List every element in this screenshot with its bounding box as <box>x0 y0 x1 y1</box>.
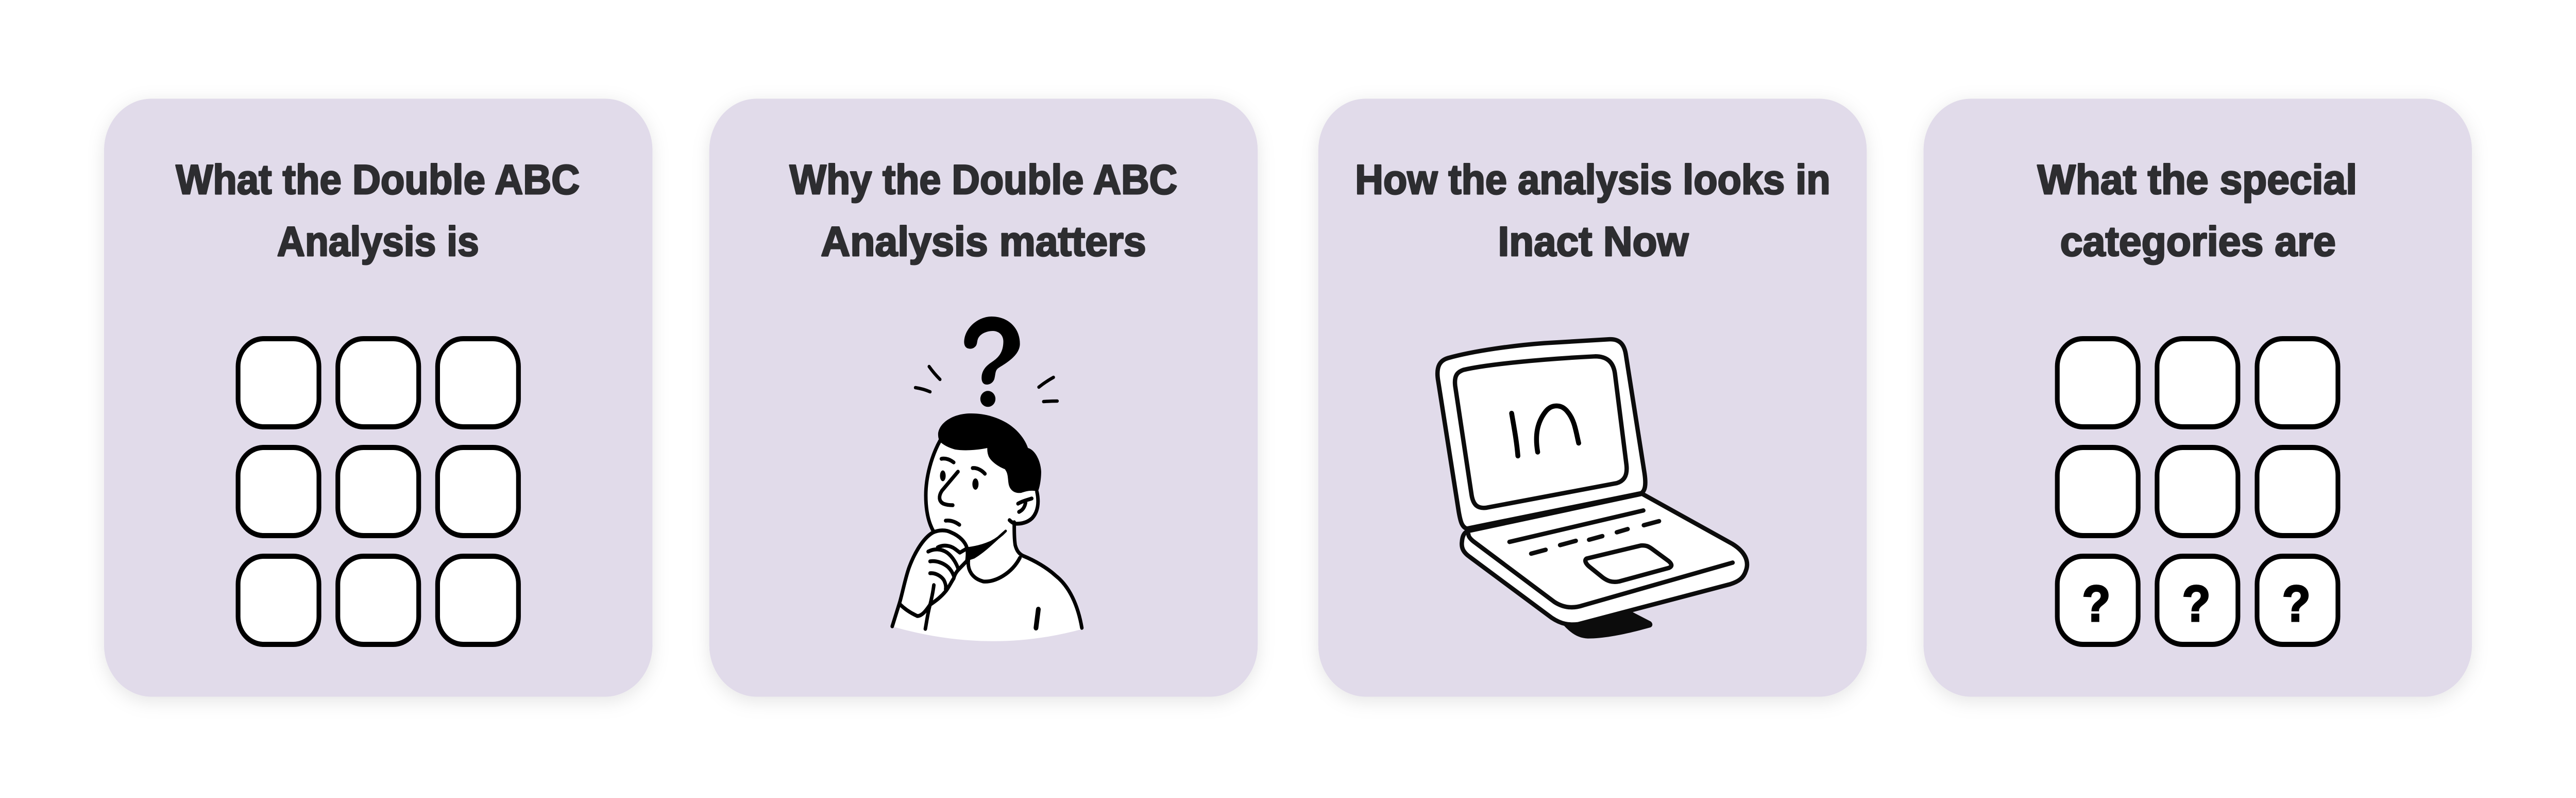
icon: trackpad <box>1585 545 1671 582</box>
heading: why the Double ABC Analysis matters: Why the Double ABC <box>790 157 1177 203</box>
icon: person silhouette <box>892 438 1083 641</box>
icon: laptop base <box>1462 494 1747 625</box>
icon: emphasis sparks <box>916 367 1057 402</box>
icon: laptop screen <box>1455 356 1626 508</box>
icon: grid of boxes with question marks: ? <box>2282 575 2311 633</box>
heading: what the special categories are: categories are <box>2060 219 2336 265</box>
heading: how the analysis looks in Inact Now: Inact Now <box>1498 219 1689 265</box>
icon: question mark <box>964 317 1020 407</box>
icon: laptop deck edge <box>1468 535 1733 607</box>
heading: how the analysis looks in Inact Now: How the analysis looks in <box>1355 157 1831 203</box>
icon: hair <box>938 413 1041 493</box>
icon: laptop lid <box>1437 339 1646 528</box>
icon: grid of boxes with question marks: ? <box>2182 575 2211 633</box>
heading: what the special categories are: What the special <box>2038 157 2357 203</box>
panel: how the analysis looks in Inact Now <box>1318 99 1867 697</box>
icon: keyboard lines <box>1510 510 1659 554</box>
heading: why the Double ABC Analysis matters <box>790 157 1177 265</box>
heading: how the analysis looks in Inact Now <box>1355 157 1831 265</box>
icon: laptop foot shadow <box>1562 612 1652 639</box>
heading: why the Double ABC Analysis matters: Analysis matters <box>821 219 1146 265</box>
panel: why the analysis matters <box>709 99 1258 697</box>
icon: face features <box>940 458 1032 525</box>
icon: grid of boxes with question marks: ? <box>2082 575 2111 633</box>
heading: what the Double ABC Analysis is: What the Double ABC <box>176 157 580 203</box>
icon: grid of nine empty boxes <box>238 339 518 644</box>
icon: laptop <box>1437 339 1747 639</box>
icon: jaw line <box>967 531 1006 559</box>
heading: what the Double ABC Analysis is: Analysis is <box>277 219 479 265</box>
icon: head and body outlines <box>892 441 1082 629</box>
icon: thinking person with question mark <box>892 317 1083 641</box>
icon: fingers <box>928 545 966 589</box>
icon: Inact logo strokes <box>1512 406 1579 456</box>
heading: what the Double ABC Analysis is <box>176 157 580 265</box>
heading: what the special categories are <box>2038 157 2357 265</box>
panel: what the special categories are <box>1923 99 2472 697</box>
icon: grid of boxes with question marks <box>2057 339 2338 644</box>
panel: what the analysis is <box>104 99 653 697</box>
